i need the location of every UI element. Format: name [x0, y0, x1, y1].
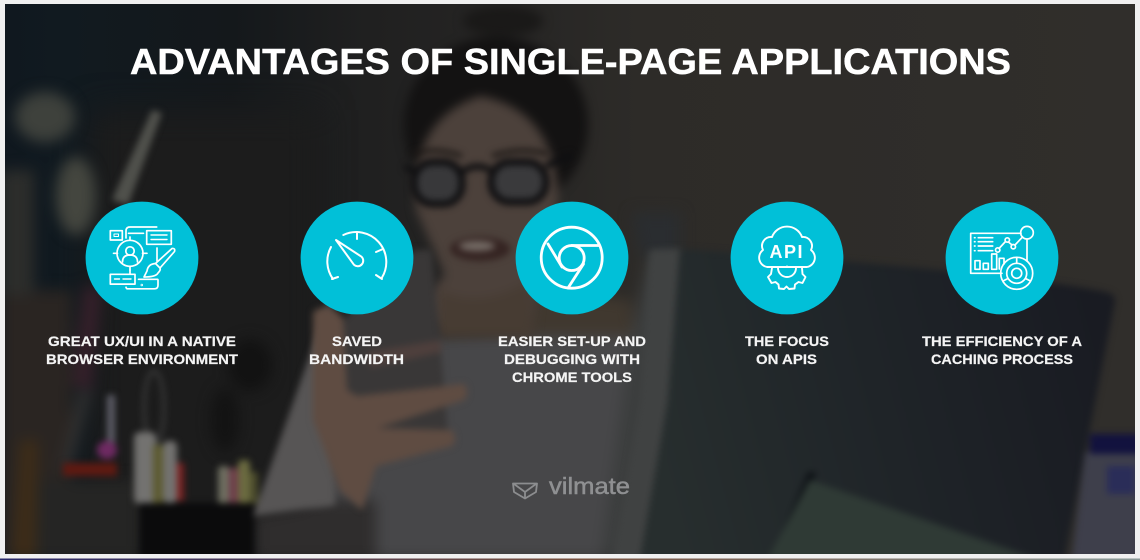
- icon circle: UX/UI: [86, 202, 198, 314]
- label: chrome tools: CHROME TOOLS: [512, 369, 632, 385]
- title: ADVANTAGES OF SINGLE-PAGE APPLICATIONS: [130, 41, 1011, 82]
- label: great UX/UI: GREAT UX/UI IN A NATIVE: [48, 333, 236, 349]
- label: saved bandwidth: [309, 333, 404, 367]
- icon: vilmate mark: [513, 484, 537, 498]
- label: caching efficiency: THE EFFICIENCY OF A: [922, 333, 1082, 349]
- icon circle: chrome: [516, 202, 628, 314]
- icon circle: API: [731, 202, 843, 314]
- icon: speedometer: [327, 232, 386, 279]
- label: chrome tools: [498, 333, 646, 385]
- label: chrome tools: DEBUGGING WITH: [504, 351, 640, 367]
- icon circle: caching: [946, 202, 1058, 314]
- label: saved bandwidth: SAVED: [332, 333, 382, 349]
- item: great UX/UI: [46, 202, 238, 367]
- bottom edge strip: [0, 558, 1140, 560]
- label: great UX/UI: [46, 333, 238, 367]
- icon: API cloud and gear: [759, 227, 815, 289]
- icon: UX/UI target, person and brush: [110, 227, 175, 289]
- label: caching efficiency: [922, 333, 1082, 367]
- item: chrome tools: [498, 202, 646, 385]
- icon: analytics board with gauge: [971, 226, 1033, 289]
- label: focus on APIs: [745, 333, 829, 367]
- item: focus on APIs: [731, 202, 843, 367]
- item: caching efficiency: [922, 202, 1082, 367]
- item: saved bandwidth: [301, 202, 413, 367]
- logo wordmark: vilmate: [549, 473, 630, 499]
- vilmate logo: [513, 473, 630, 499]
- label: focus on APIs: ON APIS: [756, 351, 817, 367]
- icon: API cloud and gear: API: [770, 242, 802, 262]
- label: caching efficiency: CACHING PROCESS: [931, 351, 1073, 367]
- label: great UX/UI: BROWSER ENVIRONMENT: [46, 351, 238, 367]
- label: chrome tools: EASIER SET-UP AND: [498, 333, 646, 349]
- label: saved bandwidth: BANDWIDTH: [309, 351, 404, 367]
- label: focus on APIs: THE FOCUS: [745, 333, 829, 349]
- icon: chrome logo: [541, 227, 602, 288]
- icon circle: bandwidth: [301, 202, 413, 314]
